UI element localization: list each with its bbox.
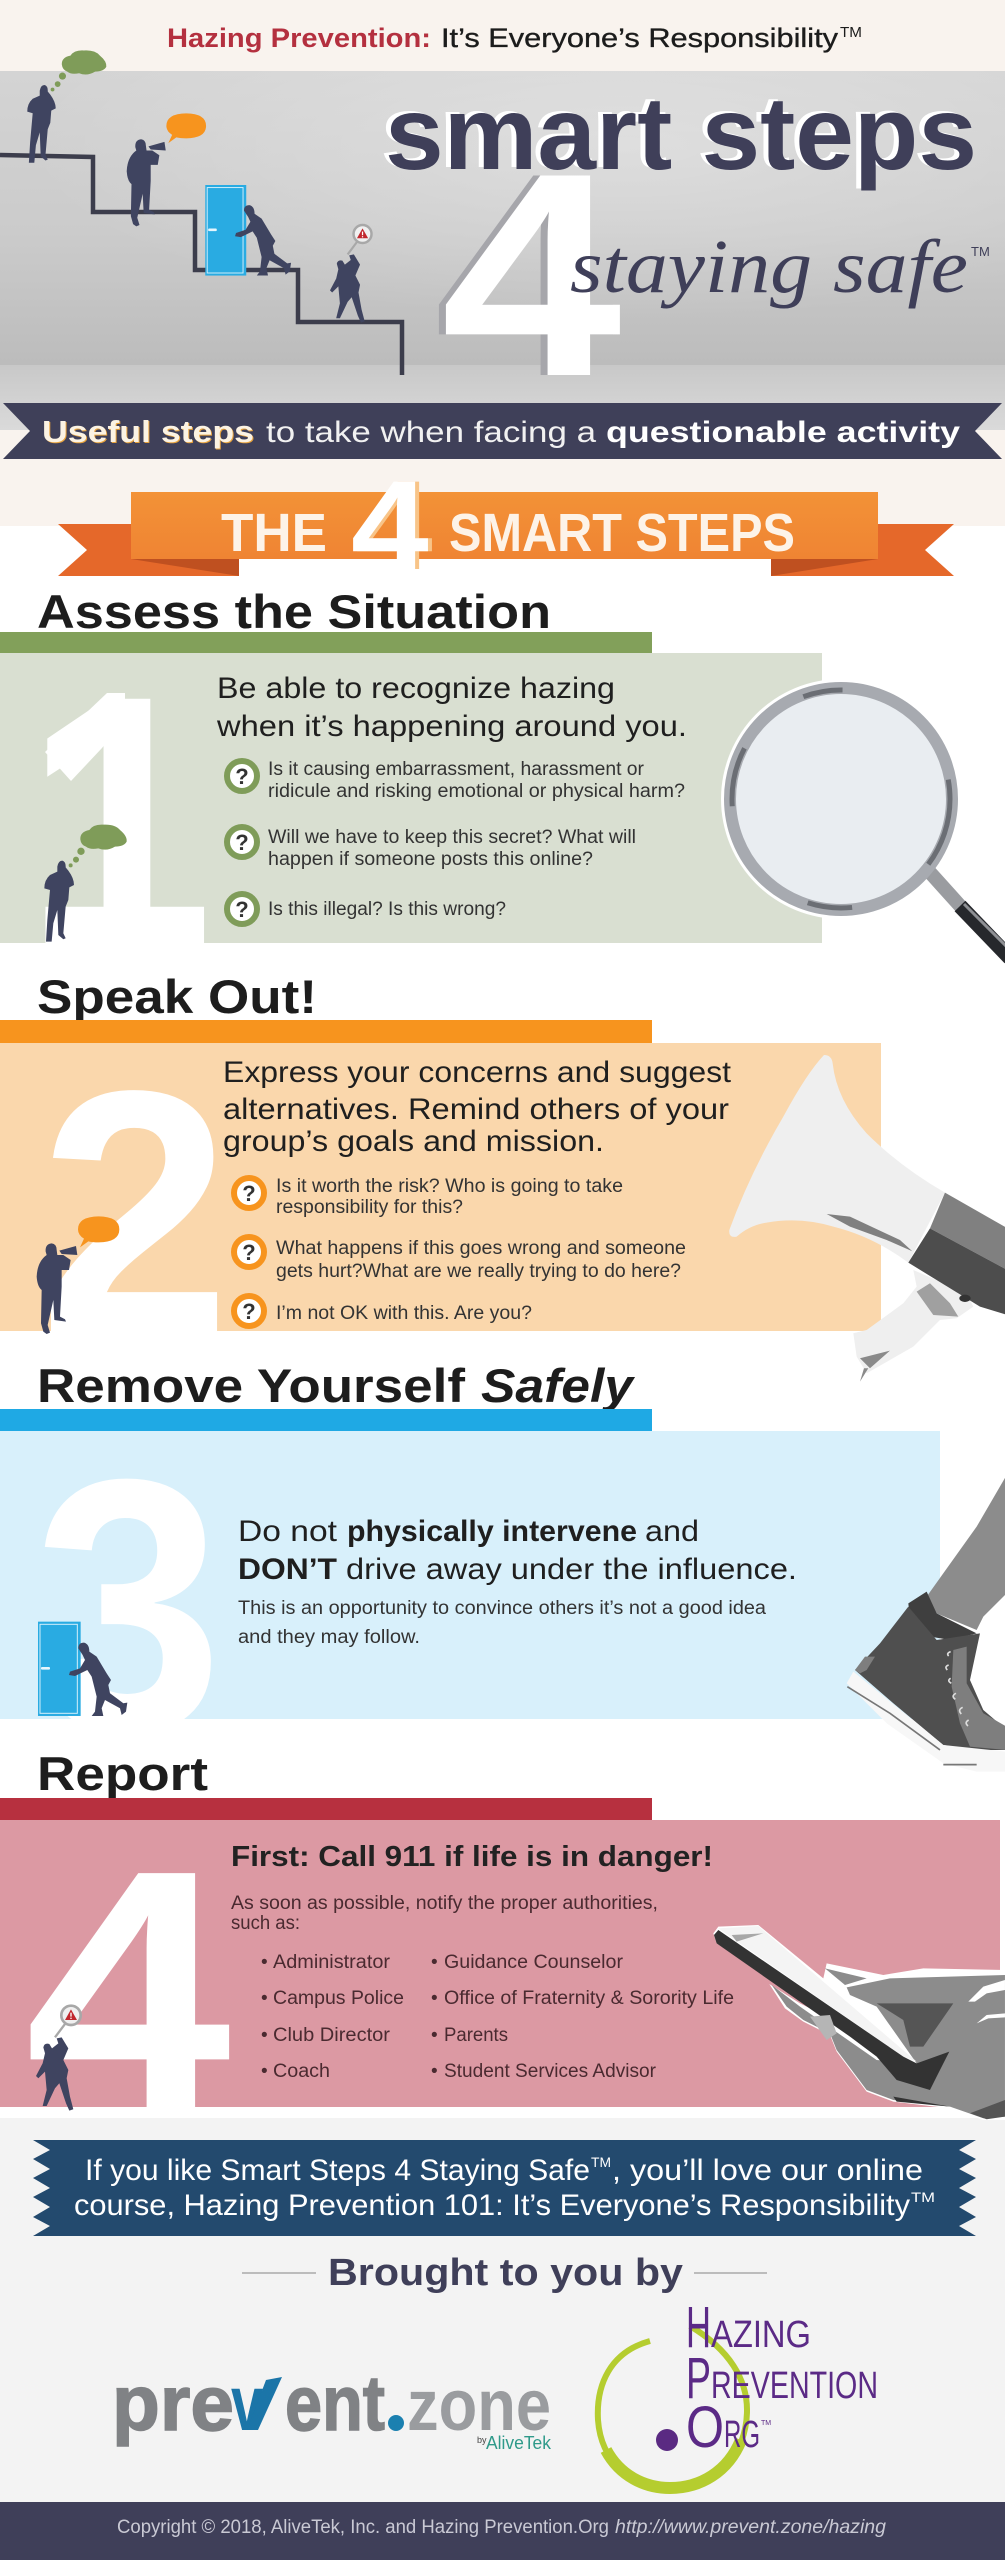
numeral 1 [45, 693, 204, 943]
list: authorities column 2: Student Services Advisor [444, 2061, 657, 2082]
panel: step 2 [0, 1043, 881, 1334]
question 2: ? [235, 830, 249, 855]
list: authorities column 1: • [261, 1988, 268, 2009]
list: authorities column 1: Club Director [273, 2025, 391, 2046]
panel: step 3 [0, 1431, 940, 1719]
top header line: TM [840, 24, 862, 41]
logo: prevent.zone: zone [407, 2366, 551, 2446]
numeral 2: 2 [39, 1020, 231, 1405]
question 1: ? [235, 764, 249, 789]
subtitle ribbon: Useful steps [42, 414, 254, 449]
numeral 3: 3 [33, 1405, 223, 1807]
top header line: It’s Everyone’s Responsibility [441, 23, 839, 53]
top header line: Hazing Prevention: [167, 23, 431, 53]
subtitle ribbon [3, 403, 1002, 459]
question 3: I’m not OK with this. Are you? [276, 1303, 532, 1324]
banner: the 4 smart steps [58, 455, 954, 597]
footer bar: http://www.prevent.zone/hazing [615, 2517, 886, 2538]
banner: the 4 smart steps: 4 [351, 455, 429, 597]
course promo ribbon: TM [911, 2189, 935, 2205]
question 3: ? [242, 1299, 256, 1324]
logo: Hazing Prevention Org [598, 2295, 878, 2490]
heading: assess the situation: Assess the Situation [37, 585, 551, 638]
question 2 [234, 1237, 686, 1282]
supporting text [238, 1598, 766, 1648]
list: authorities column 2: Office of Fraternity & Sorority Life [444, 1988, 734, 2009]
question 1: Is it worth the risk? Who is going to take [276, 1176, 623, 1197]
supporting text: and they may follow. [238, 1627, 420, 1648]
list: authorities column 2: Guidance Counselor [444, 1952, 624, 1973]
banner: the 4 smart steps: THE [221, 503, 327, 563]
list: authorities column 2: • [431, 1988, 438, 2009]
question 3 [227, 894, 506, 924]
question 2: happen if someone posts this online? [268, 849, 593, 870]
question 1 [234, 1176, 623, 1218]
lead text [238, 1515, 797, 1586]
lead text: Be able to recognize hazing [217, 672, 615, 705]
figure with warning sign [36, 2006, 81, 2111]
numeral 4: 4 [25, 1800, 233, 2180]
hero: figure leaving through door [205, 185, 291, 276]
question 1: Is it causing embarrassment, harassment or [268, 759, 645, 780]
figure leaving through door [38, 1622, 127, 1716]
course promo ribbon: course, Hazing Prevention 101: It’s Everyone’s Responsibility [74, 2189, 910, 2222]
logo: prevent.zone: pre [112, 2359, 234, 2447]
numeral 1: 1 [24, 622, 214, 1018]
list: authorities column 2: • [431, 2061, 438, 2082]
lead text: when it’s happening around you. [216, 710, 687, 743]
heading: report: Report [37, 1747, 208, 1800]
question 2: Will we have to keep this secret? What will [268, 827, 636, 848]
lead text: physically intervene [347, 1515, 637, 1548]
lead text: DON’T [238, 1553, 337, 1586]
footer bar [0, 2502, 1005, 2560]
question 3: Is this illegal? Is this wrong? [268, 899, 506, 920]
top header line [167, 23, 862, 53]
list: authorities column 1 [261, 1952, 404, 2082]
icon: magnifying glass [721, 679, 1005, 958]
list: authorities column 2: Parents [444, 2025, 508, 2046]
hero: figure with warning sign [330, 225, 372, 323]
list: authorities column 1: Coach [273, 2061, 330, 2082]
bottom section background [0, 2118, 1005, 2502]
hero: stairs line [0, 155, 402, 375]
list: authorities column 1: • [261, 2061, 268, 2082]
icon: hand holding phone [713, 1925, 1005, 2120]
question 1: responsibility for this? [276, 1197, 463, 1218]
panel: step 1 [0, 653, 822, 943]
question 1 [227, 759, 685, 802]
heading: report [0, 1747, 652, 1820]
question 2: ? [242, 1240, 256, 1265]
list: authorities column 1: Campus Police [273, 1988, 404, 2009]
course promo ribbon [33, 2140, 976, 2236]
question 3: ? [235, 897, 249, 922]
logo: Hazing Prevention Org: AZING [711, 2314, 811, 2356]
supporting text: This is an opportunity to convince others it’s not a good idea [238, 1598, 766, 1619]
heading: assess the situation [0, 585, 652, 653]
list: authorities column 1: • [261, 1952, 268, 1973]
list: authorities column 2: • [431, 2025, 438, 2046]
heading: remove yourself safely: Safely [481, 1359, 636, 1412]
hero: big numeral 4: 4 [441, 113, 624, 437]
list: authorities column 1: • [261, 2025, 268, 2046]
lead text: and [645, 1515, 699, 1548]
lead text [216, 672, 687, 743]
course promo ribbon: If you like Smart Steps 4 Staying Safe [85, 2154, 590, 2187]
heading: speak out: Speak Out! [37, 970, 317, 1023]
subtitle ribbon: to take when facing a [266, 416, 596, 449]
figure with megaphone [37, 1216, 119, 1334]
heading: brought to you by: Brought to you by [328, 2252, 683, 2294]
logo: prevent.zone: v [231, 2359, 263, 2447]
hero: figure with megaphone [127, 113, 206, 226]
question 3 [234, 1296, 532, 1326]
banner: the 4 smart steps: 4 [355, 455, 433, 597]
supporting text: such as: [231, 1913, 300, 1934]
banner: the 4 smart steps: SMART STEPS [449, 503, 795, 563]
hero: title staying safe: TM [971, 244, 990, 259]
subtitle ribbon: Useful steps [43, 415, 255, 450]
question 2 [227, 827, 636, 870]
hero: big numeral 4: 4 [434, 113, 617, 437]
heading: remove yourself safely: Remove Yourself [37, 1359, 465, 1412]
question 1: ? [242, 1181, 256, 1206]
course promo ribbon: , you’ll love our online [612, 2154, 923, 2187]
heading: speak out [0, 970, 652, 1043]
question 1: ridicule and risking emotional or physical harm? [268, 781, 685, 802]
lead text: drive away under the influence. [346, 1553, 797, 1586]
logo: prevent.zone: AliveTek [486, 2433, 552, 2453]
subtitle ribbon: questionable activity [606, 416, 960, 449]
question 2: What happens if this goes wrong and someone [276, 1238, 686, 1259]
heading: remove yourself safely [0, 1359, 652, 1431]
figure thinking [44, 825, 127, 942]
logo: Hazing Prevention Org: P [686, 2346, 711, 2411]
logo: prevent.zone: by [477, 2435, 487, 2445]
lead text: alternatives. Remind others of your [223, 1093, 729, 1126]
list: authorities column 1: Administrator [273, 1952, 391, 1973]
logo: Hazing Prevention Org: TM [761, 2420, 771, 2427]
logo: prevent.zone: ent [285, 2359, 385, 2447]
icon: walking leg and sneaker [847, 1475, 1005, 1772]
panel: step 4 [0, 1820, 1000, 2111]
question 2: gets hurt?What are we really trying to do here? [276, 1261, 681, 1282]
hero: figure thinking [27, 50, 106, 163]
hero: title smart steps: smart steps [385, 76, 977, 192]
list: authorities column 2: • [431, 1952, 438, 1973]
logo: Hazing Prevention Org: O [686, 2395, 724, 2460]
hero: title staying safe: staying safe [570, 225, 968, 309]
course promo ribbon: TM [591, 2154, 611, 2170]
supporting text [231, 1893, 658, 1934]
icon: megaphone held in hand [729, 1055, 1005, 1382]
hero: title smart steps: smart steps [380, 74, 972, 190]
supporting text: As soon as possible, notify the proper authorities, [231, 1893, 658, 1914]
list: authorities column 2 [431, 1952, 734, 2082]
lead text: Do not [238, 1515, 338, 1548]
logo: Hazing Prevention Org: REVENTION [711, 2365, 878, 2407]
lead text: group’s goals and mission. [223, 1125, 604, 1158]
logo: Hazing Prevention Org: H [686, 2295, 711, 2360]
footer bar: Copyright © 2018, AliveTek, Inc. and Hazing Prevention.Org [117, 2517, 609, 2538]
logo: Hazing Prevention Org: RG [724, 2414, 760, 2456]
hero: concrete wall [0, 71, 1005, 430]
lead text: First: Call 911 if life is in danger! [231, 1841, 713, 1873]
lead text: Express your concerns and suggest [223, 1056, 732, 1089]
logo: prevent.zone [112, 2359, 552, 2453]
lead text [223, 1056, 732, 1158]
